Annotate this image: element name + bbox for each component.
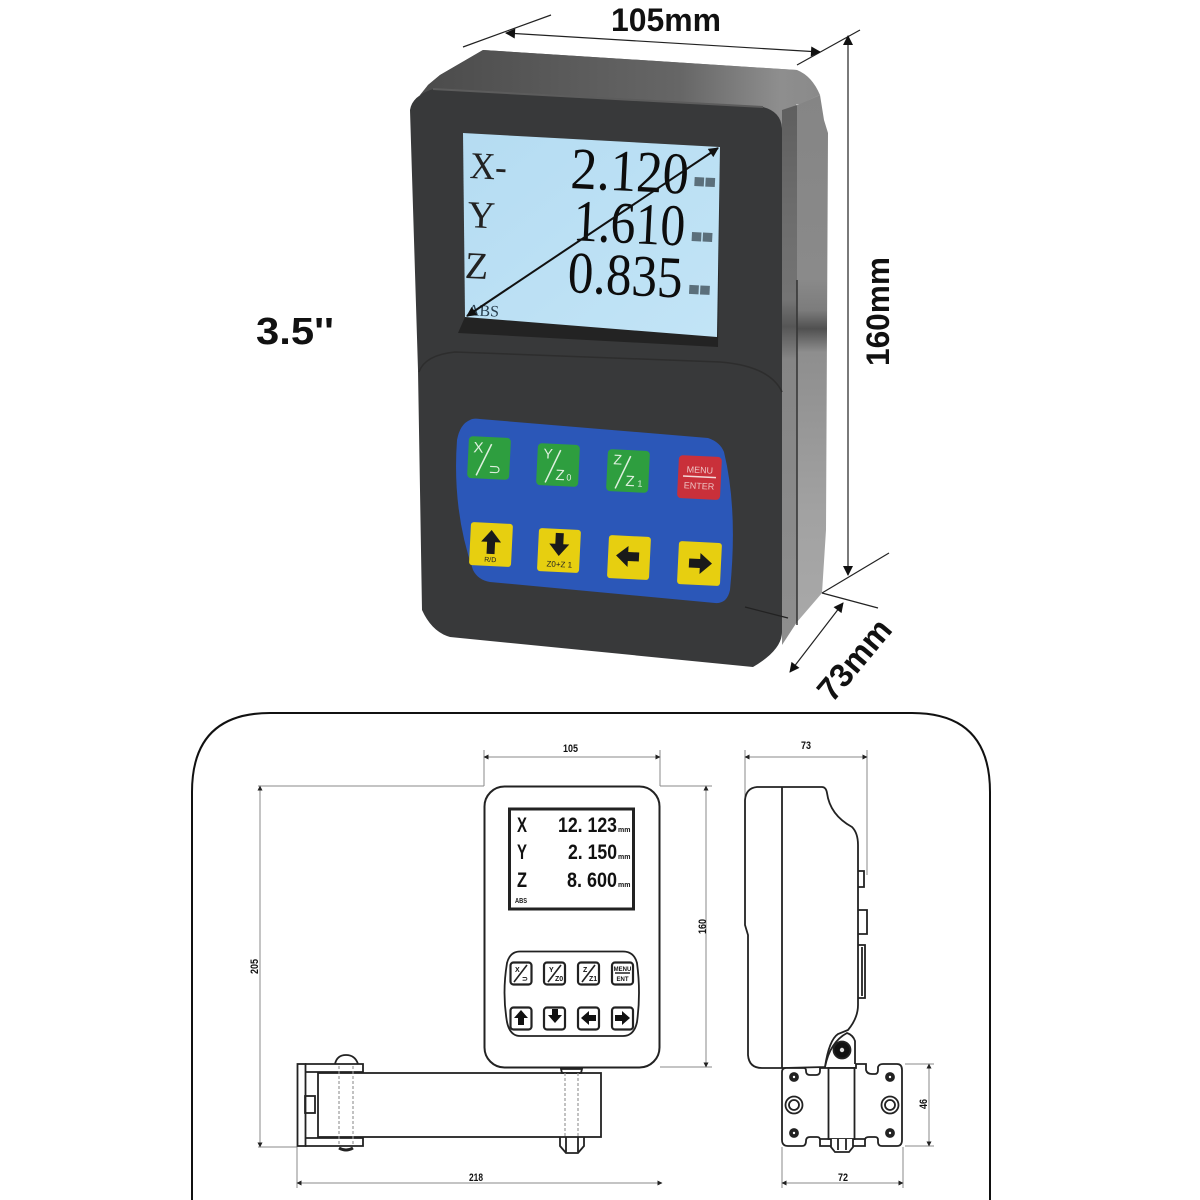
key Z/Z1: 1 [637,478,643,489]
dimension: height 160mm [822,36,896,593]
screen diagonal arrow [467,148,718,316]
drawing: screen: ABS [515,898,527,905]
panel: technical drawing [192,713,990,1200]
drawing: arm top view [298,1055,601,1153]
dimension labels: 105 [563,743,578,755]
dimension labels: 218 [469,1172,483,1184]
key Z/Z1: Z [625,473,635,490]
drawing: keypad [504,952,639,1036]
drawing: front view: ENT [616,977,629,983]
drawing: front view: ⊃ [522,976,528,983]
key Z/Z1: Z [613,451,623,468]
drawing: screen: Y [517,841,527,864]
key Y/Z0: Y [543,445,554,462]
drawing: screen: mm [618,827,630,834]
dimension: height 160mm: 160mm [860,257,896,366]
dimension: width 105mm [463,2,860,65]
front shell seam [419,352,782,392]
drawing: front view: Z1 [589,976,597,983]
mm units [689,177,715,295]
drawing: front view: X [515,967,520,974]
dimension labels: 73 [801,740,811,752]
device photo [410,50,828,667]
key up [469,522,513,567]
drawing: screen: mm [618,882,630,889]
dimension labels: 160 [697,919,709,934]
axis Z reading: 0.835 [566,239,684,311]
key up: R/D [484,557,496,564]
key X: ⊃ [488,461,501,479]
screen size label: 3.5'' [256,311,334,353]
drawing: front view: Y [549,967,554,974]
drawing: front view: Z [583,967,588,974]
key MENU ENTER: MENU [686,464,713,476]
hinge knob [825,1033,855,1067]
drawing: front view: Z0 [555,976,563,983]
device side and top shell [420,50,828,645]
drawing: screen: mm [618,854,630,861]
drawing: screen: 2. 150 [568,841,617,864]
drawing: screen: Z [517,869,527,892]
key X: X [473,439,484,457]
dimension: depth 73mm [790,593,899,708]
key MENU ENTER [677,455,722,500]
axis Y reading [466,182,687,259]
dimension labels: 205 [249,959,261,974]
ABS label: ABS [468,302,499,321]
screen bezel lip [458,133,720,347]
key Y/Z0: Z [555,467,565,484]
dimension: width 105mm: 105mm [611,2,721,38]
drawing: screen: X [517,814,527,837]
device front face [410,89,782,667]
axis Z reading: Z [464,245,489,288]
drawing: screen: 8. 600 [567,869,617,892]
axis Y reading: 1.610 [572,187,687,259]
key right [677,541,722,586]
key Y/Z0 [536,443,580,487]
depth reference tick [745,607,788,618]
dimension labels [249,740,930,1184]
drawing: screen: 12. 123 [558,814,617,837]
dimension lines [258,750,934,1188]
key MENU ENTER: ENTER [684,480,715,492]
drawing: screen [510,809,634,909]
keypad panel [456,419,788,618]
key Z/Z1 [606,449,650,493]
axis X reading [469,130,690,207]
key left [607,535,651,580]
front rim highlight [433,89,763,107]
bracket holes [790,1073,894,1137]
side connectors [858,871,867,998]
key Y/Z0: 0 [566,472,572,483]
drawing: front view [484,786,660,1068]
key down [537,528,581,573]
drawing: front view: MENU [614,967,631,973]
axis X reading: X- [469,145,508,189]
key X [467,436,511,480]
dimension: depth 73mm: 73mm [809,611,899,708]
key down: Z0+Z 1 [546,559,573,570]
LCD screen [463,130,720,337]
dimension labels: 46 [918,1099,930,1109]
axis Y reading: Y [467,194,496,237]
drawing: side view [745,787,902,1152]
axis X reading: 2.120 [569,135,690,207]
dimension labels: 72 [838,1172,848,1184]
axis Z reading [463,234,684,311]
mounting bracket [782,1064,902,1146]
